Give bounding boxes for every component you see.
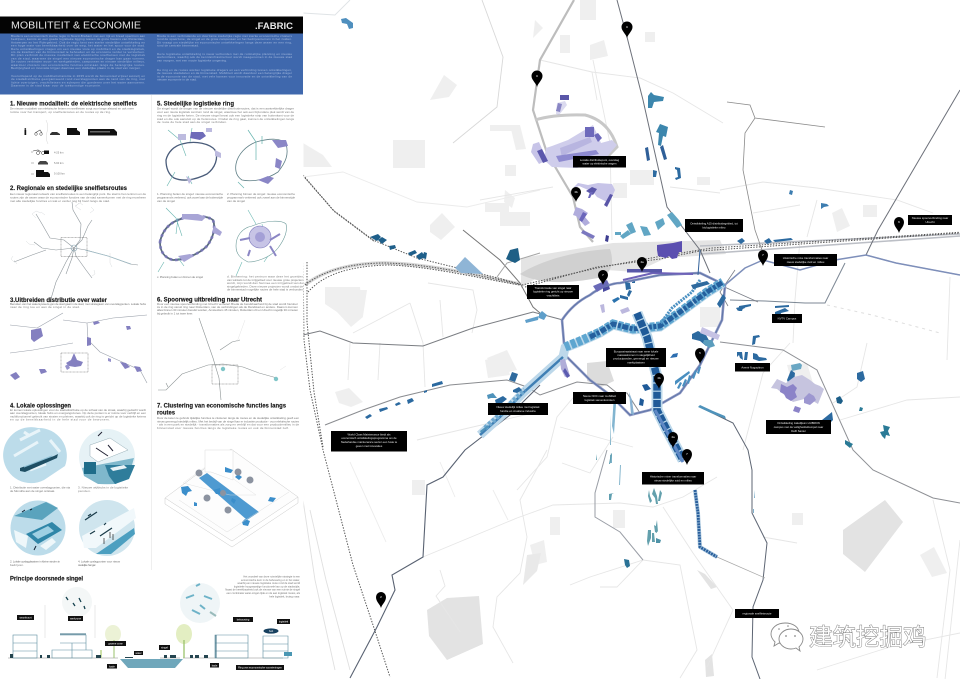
intro blue panel: in de economie van de stad, met vele kansen voor innovatie en de ontwikkeling van de	[157, 74, 292, 78]
pin markers: 6	[898, 220, 900, 224]
callout: historische mixer zuid: Historische mixer transformaties naar	[650, 474, 696, 478]
pale local roads	[303, 0, 960, 679]
diagram: regional network	[11, 202, 138, 306]
intro blue panel: Dit plan verbindt de nieuwe modaliteit van elektrische snelfietsen met de logistiek	[11, 53, 145, 57]
section labels: logistiek	[279, 620, 289, 624]
callout: Europastraat: Europastraatstraat naar meer lokale	[614, 350, 659, 354]
section labels: Ring van ecomomische voorzieningen	[238, 666, 282, 670]
section 6: ze in de ring vanuit ring naar Rotterdam, van de verbindingen als de Randstad en andere. Daarom kunnen	[157, 305, 298, 309]
panel: left text sheet	[0, 0, 304, 679]
intro blue panel: waardoor clusters van economische functies ontstaan langs de belangrijke routes.	[11, 63, 145, 67]
section labels: werkzone	[70, 617, 82, 621]
intro blue panel: De routes verbinden woon- en werkgebieden, campussen en nieuwe stedelijke milieus,	[11, 60, 145, 64]
intro blue panel: werkmilieus, waarbij ook de kennisinfrastructuur wordt meegenomen in de nieuwe stad	[157, 55, 292, 59]
pin markers: 7	[686, 452, 688, 456]
icon rows: bike and load: 5-100 km	[54, 172, 65, 176]
captions ring 1 and 2: 1. Planning buiten de singel: nieuwe economische	[157, 192, 223, 196]
section labels: water	[135, 651, 142, 655]
icon rows: bike and load	[31, 150, 65, 177]
intro blue panel: een hoge mate van bereikbaarheid over de weg, het water en het spoor voor de stad.	[11, 44, 145, 48]
watermark: 建筑挖掘鸡	[809, 624, 926, 650]
section 5	[157, 102, 303, 292]
callout: historische mixer oost: nieuw stedelijke zuid en milieu	[787, 260, 825, 264]
intro blue panel: Vooruitlopend op de mobiliteitstransitie in 2035 wordt de binnenstad vrijwel autovrij en	[11, 74, 145, 78]
callout: distributiepunt: Locatie distributiepunt, overslag	[580, 158, 620, 162]
section 4: 4. Lokale oplossingen	[10, 404, 71, 410]
pin markers: 7	[762, 253, 764, 257]
callout: distributiepunt	[573, 156, 626, 168]
captions ring 3 and 4: singelgebieden. Deze nieuwe projecten wordt omdat de	[227, 284, 303, 288]
callout: A15: Ontwikkeling A15-distributiegebied, tot	[690, 222, 738, 226]
intro blue panel: van morgen, met een mooie logistieke omgeving.	[157, 58, 227, 62]
intro blue panel: de stadsdistributie georganiseerd rond overslagpunten aan de rand van de ring, met	[11, 77, 145, 81]
singel ring canal	[562, 255, 960, 415]
callout: NOC: Nieuw NOC naar mobiliteit	[583, 394, 616, 398]
captions ring 3 and 4: van winkels tot de inrijgebied voor nieuwe grote projecten	[227, 278, 303, 282]
diagram: ring 2	[236, 130, 288, 188]
intro blue panel: rond de spoorzone, de singel en de grote campussen en het bedrijventerrein in het zuiden.	[157, 37, 292, 41]
captions ring 1 and 2	[157, 192, 295, 203]
callout: Europastraat: marktplaatsen	[627, 360, 645, 364]
explanation text: Naast de bereikbaarheid ook de nieuwe van een ruimte de singel	[225, 588, 300, 592]
caption row 2: 2. Lokale opslagplaatsen in kleine steden in	[10, 560, 60, 564]
trees	[101, 624, 192, 658]
pin markers: 4b	[657, 376, 661, 380]
captions ring 3 and 4: c. Planning buiten en binnen de singel	[157, 275, 203, 279]
section 5: voor een nieuw logistiek centrum rond de singel, waarmee het ook een bijzondere plek wordt van de	[157, 110, 294, 114]
section 4: multifunctioneel gebruik van straten en pleinen, waarbij ook de ring is gericht op de logistieke ketens	[10, 414, 146, 418]
callout: stedelijk milieu	[488, 403, 548, 415]
blue buildings	[341, 18, 890, 568]
intro blue panel: nieuwe economie in de stad.	[157, 78, 197, 82]
section 6: bij gebruik in 1 tot twee keer.	[157, 311, 193, 315]
section 6: 6. Spoorweg uitbreiding naar Utrecht	[157, 298, 262, 304]
icon rows: bike and load: 5-60 km	[54, 161, 63, 165]
callout: historische mixer zuid: nieuw stedelijke zuid en milieu	[654, 478, 692, 482]
intro blue panel: Antwerpen en het Ruhrgebied. Ook de regio kent een sterke stedelijke ontwikkeling en	[11, 40, 145, 44]
explanation text: economische kern in de bebouwing en in het water,	[241, 578, 300, 582]
section 1: 1. Nieuwe modaliteit: de elektrische snelfiets	[10, 102, 138, 108]
callout: HUBRON	[766, 420, 831, 434]
section 1	[10, 102, 138, 177]
intro blue panel: Dit vraagt om stedelijke en economische ontwikkelingen langs deze assen en een ring,	[157, 40, 292, 44]
regional grey road north	[533, 0, 593, 242]
detail circles	[62, 583, 220, 623]
section: principe doorsnede: Principe doorsnede singel	[10, 576, 83, 582]
section 6	[157, 298, 298, 400]
caption row 2	[10, 560, 121, 567]
section labels: kade	[109, 664, 115, 668]
title bar: .FABRIC	[255, 21, 293, 32]
section 2	[10, 186, 146, 306]
title bar: MOBILITEIT & ECONOMIE	[11, 20, 141, 32]
circle 4: street	[79, 500, 136, 556]
callout: singel	[527, 285, 579, 299]
section 5: De singel wordt de drager van de nieuwe stedelijke distributieroutes, dat is een aantrekkelijke drager	[157, 106, 294, 110]
circle 1: boat	[3, 427, 67, 483]
section labels: hub	[269, 629, 274, 633]
section 3: Benutten van het watersysteem van de stad gaat in de stad, met strategieën van overslagpunten. Lokale hubs	[10, 302, 146, 306]
railway bundle west	[305, 263, 520, 285]
captions ring 1 and 2: 2. Planning binnen de singel: nieuwe economische	[227, 192, 295, 196]
caption row 1: 3. Nieuwe wijkhubs in de logistieke	[78, 486, 128, 490]
section 4	[3, 404, 147, 567]
section labels: groene zone	[108, 642, 123, 646]
section labels: woonbuurt	[19, 616, 32, 620]
explanation text: Het voordeel van deze ruimtelijke strategie is een	[243, 574, 301, 578]
section 6: alles binnen 30 minuten bereikt worden, Amsterdam 45 minuten, Rotterdam 24 en Utrecht mogelijk 30 minuten	[157, 308, 298, 312]
diagram: rail to Utrecht	[158, 318, 286, 400]
intro blue panel: om de kwaliteit van de binnenstad te behouden en de economie verder te versterken.	[11, 50, 145, 54]
diagram: ring 4	[236, 210, 287, 276]
callout: snelfietsroute	[735, 609, 779, 618]
section drawing	[8, 583, 292, 670]
caption row 2: stedelijke hangar.	[78, 563, 96, 567]
intro blue panel: Deze logistieke ontwikkeling is nauw verbonden met de ruimtelijke planning en nieuwe	[157, 52, 292, 56]
section 5: ring en de logistieke keten. De nieuwe singel bevat ook een logistieke strip van buitenkant voor de	[157, 113, 294, 117]
captions ring 3 and 4: de binnenstad mogelijke routes de hele stad is verbonden	[227, 288, 303, 292]
callout: singel: vrachtfiets	[547, 293, 560, 297]
callout: Europastraat: massastromen in stegelijkheid	[617, 353, 655, 357]
callout: snelfietsroute: regionale snelfietsroute	[743, 612, 772, 616]
callout: World Class Maintenance: Nederlandse maintenance sector een fusie te	[341, 440, 398, 444]
section 2: routes zijn de assen waar de economische functies van de stad samenkomen met de ring eromheen	[10, 195, 146, 199]
intro blue panel: Daarmee is de stad klaar voor de toekomstige economie.	[11, 84, 101, 88]
explanation text: logistieke hoogwaardige functionele kan op de stadszijde,	[234, 584, 300, 588]
intro blue panel: De ring en de routes worden logistieke dragers en een verbinding tussen ontwikkelingen,	[157, 68, 292, 72]
column divider	[150, 95, 152, 570]
captions ring 3 and 4: wordt, mijn wordt dan hiermee een inrijgebied van de	[227, 281, 303, 285]
railway tracks	[303, 175, 960, 677]
section 4: en op de bereikbaarheid in de hele stad voor de bewoners.	[10, 418, 110, 422]
explanation text	[225, 574, 301, 598]
callout: World Class Maintenance	[331, 431, 407, 452]
captions ring 1 and 2: van de singel	[227, 199, 245, 203]
callout: A15: biologistieke mikro	[702, 226, 726, 230]
explanation text: waarbij een nieuwe logistieke route rond de stad wordt	[237, 581, 300, 585]
callout: stedelijk milieu: functie en creatieve industrie	[500, 409, 536, 413]
callout: World Class Maintenance: World Class Maintenance biedt als	[347, 432, 391, 436]
pin markers: 4a	[671, 435, 675, 439]
intro blue panel: rond de centrale binnenstad.	[157, 44, 199, 48]
caption row 1: de Mondria aan de singel ontstaat.	[10, 489, 55, 493]
captions ring 1 and 2: programma's verbreed, ook zowel aan de buitenzijde	[157, 195, 223, 199]
section 7	[157, 404, 300, 547]
section 1: De nieuwe modaliteit van elektrische fietsen en snelfietsen zorgt voor lange afstand en ook meer	[10, 106, 134, 110]
purple buildings	[531, 95, 824, 413]
caption row 1: panden.	[78, 489, 91, 493]
callout: distributiepunt: water op elektrische wagen	[583, 162, 617, 166]
section 7: binnenstad voor nieuwe functies langs de logistieke routes en ook de binnenstad zelf.	[157, 426, 289, 430]
section 3	[10, 298, 147, 383]
section 2: 2. Regionale en stedelijke snelfietsroutes	[10, 186, 128, 192]
callout: spoorverbinding: Nieuwe spoorverbinding naar	[912, 216, 948, 220]
callout: Europastraat: productpanden, gemengd en nieuwe	[613, 356, 659, 360]
callout: historische mixer oost: Historische mixe transformaties naar	[783, 256, 828, 260]
pin markers: 2	[380, 595, 382, 599]
icon row: vehicles	[24, 120, 117, 144]
callout: spoorverbinding: Utrecht	[925, 220, 935, 224]
station area band and quarry	[521, 240, 726, 288]
pin markers: 4a	[640, 260, 644, 264]
intro blue panel: Breda is een economisch sterke regio in Noord-Brabant met een rijk en breed spectrum aan	[11, 34, 145, 38]
circle 2: hub	[79, 429, 135, 485]
callout: NOC: logistiek samenkomsten	[585, 398, 615, 402]
main dark roads	[303, 0, 960, 679]
section labels: kade	[212, 664, 218, 668]
section 6: Door een nieuwe spoorverbinding met Utrecht verbetert Breda de bereikbaarheid bij de stad wordt hierdoor	[157, 302, 298, 306]
callout: singel: Transformatie van singel naar	[535, 286, 572, 290]
callout: World Class Maintenance: economisch ontwikkelingsprogramma om de	[341, 436, 397, 440]
faint urban fabric	[303, 0, 947, 577]
callout: singel: logistieke ring gericht op nieuwe	[533, 290, 573, 294]
section 1: ruimte voor het transport, op snelfietsroutes en de routes op de ring.	[10, 110, 111, 114]
pin markers: 4b	[574, 190, 578, 194]
captions ring 3 and 4	[157, 274, 303, 292]
caption row 1: 1. Distributie met water overslagpunten, die via	[10, 486, 70, 490]
captions ring 3 and 4: d. Binnenring: het centrum waar deze het groeiden	[227, 274, 303, 278]
callout: campus	[772, 314, 802, 323]
section 5: 5. Stedelijke logistieke ring	[157, 102, 234, 108]
station north band	[700, 234, 960, 254]
pin markers: 5	[699, 351, 701, 355]
callout: historische mixer oost	[774, 254, 837, 266]
section 7: routes	[157, 410, 176, 416]
diagram: water distribution	[10, 313, 147, 383]
callout: HUBRON: Delft Sanier	[791, 429, 806, 433]
intro blue panel: Breda is een verbindende en duurzame stedelijke regio met sterke economische clusters	[157, 34, 292, 38]
caption row 2: bedrijven.	[10, 563, 24, 567]
callout: stedelijk milieu: Nieuw stedelijk milieu met logistiek	[496, 405, 540, 409]
pin markers: 7	[602, 273, 604, 277]
intro blue panel: Bedrijvigheid en innovatie krijgen daarmee een duidelijke plaats in de stad van morgen.	[11, 66, 141, 70]
callout: HUBRON: Ontwikkeling zakelijkum HUBRON	[777, 421, 820, 425]
street furniture	[10, 652, 292, 658]
section labels	[17, 615, 290, 670]
callout: HUBRON: campus met de veiligheidsdrempel naar	[774, 425, 823, 429]
callout: historische mixer zuid	[642, 472, 704, 484]
intro blue panel	[0, 34, 303, 94]
callout: A15	[685, 219, 743, 232]
callout: Europastraat	[606, 348, 666, 367]
diagram: ring 3	[158, 208, 222, 272]
callout: spoorverbinding	[908, 215, 952, 225]
explanation text: een combinatie water-singel-zijde en de aan logistiek routes, als	[226, 591, 301, 595]
city map	[303, 0, 960, 679]
callout: Avenir	[735, 363, 770, 372]
captions ring 1 and 2: programma's verbreed ook zowel aan de binnenzijde	[227, 195, 295, 199]
logistic corridors with buildings	[480, 250, 723, 557]
section: principe doorsnede	[8, 574, 301, 670]
section 7: Door de keten te gebruik tijdelijke functies te clusteren langs de routes en de stedelijke ontwikkeling geeft een	[157, 416, 299, 420]
title bar	[0, 16, 303, 34]
larger grey fabric blocks	[427, 361, 903, 677]
section labels: bebouwing	[237, 618, 250, 622]
section 2: met alle stedelijke functies en wat er verder nog bij hoort langs de stad.	[10, 199, 110, 203]
icon: wechat	[771, 623, 803, 651]
section 5: stad en die ook aansluit op de fietsroutes. Omdat de ring gaat, kunnen de ontwikkelingen langs	[157, 117, 294, 121]
caption row 2: 4. Lokale opslagpunten voor nieuw	[78, 560, 121, 564]
section 3: 3.Uitbreiden distributie over water	[10, 298, 108, 304]
section 7: nieuw gemengd stedelijk milieu. Met het bedrijf van de singel kan er industrie productie - voor elektrische routes	[157, 419, 300, 423]
callout: campus: NVTV Campus	[778, 316, 797, 320]
intro blue panel: de nieuwe stadsdelen en de binnenstad. Mobiliteit wordt daardoor een belangrijke drager	[157, 71, 292, 75]
callout: NOC	[573, 392, 626, 404]
intro blue panel: van de stad, waarmee de singel een nieuwe economische drager kan gaan vormen.	[11, 56, 145, 60]
pin markers: 9	[536, 74, 538, 78]
section labels: singel	[161, 646, 168, 650]
circle 3: square	[10, 500, 66, 556]
caption row 1	[10, 486, 128, 493]
intro blue panel: bedrijven, kennis en een goede logistieke ligging tussen de grote havens van Rotterdam,	[11, 37, 145, 41]
intro blue panel: lichte voertuigen, vrachtfietsen en schepen die goederen over het water aanvoeren.	[11, 80, 145, 84]
pin markers: 9	[626, 25, 628, 29]
icon rows: bike and load: 4-25 km	[54, 150, 63, 154]
section 2: Een nieuw regionaal netwerk van snelfietsroutes is een belangrijk punt. De stad is het centrum en de	[10, 192, 146, 196]
callout: Avenir: Avenir Nogacitron	[741, 366, 764, 370]
diagram: ring 1	[166, 128, 221, 186]
callout: World Class Maintenance: geven met innovaties	[356, 444, 383, 448]
section 4: aan overslagpunten, lokale hubs en overgangszones. Op deze punten is er ruimte voor verblijf en een	[10, 411, 146, 415]
intro blue panel: Deze ontwikkelingen vragen om een nieuwe visie op mobiliteit en de stadslogistiek,	[11, 47, 145, 51]
section 5: de route de hele stad aan de singel verbinden.	[157, 120, 227, 124]
section 7: 7. Clustering van economische functies langs	[157, 404, 287, 410]
section 7: - als in een park en stedelijk - transformaties als zorg en verblijf en dat voor een productiemilieu in de	[157, 423, 299, 427]
section 4: Er komen lokale oplossingen voor de stadsdistributie op de schaal van de straat, waarbij gedacht wordt	[10, 408, 146, 412]
isometric street block	[165, 449, 298, 547]
explanation text: hele logistiek, bruisg maar.	[269, 594, 300, 598]
map callout labels	[331, 156, 952, 618]
section 3: naar de ring toe en aan de singel in de stad.	[10, 305, 80, 309]
captions ring 1 and 2: van de singel	[157, 199, 175, 203]
pin markers	[376, 22, 904, 608]
